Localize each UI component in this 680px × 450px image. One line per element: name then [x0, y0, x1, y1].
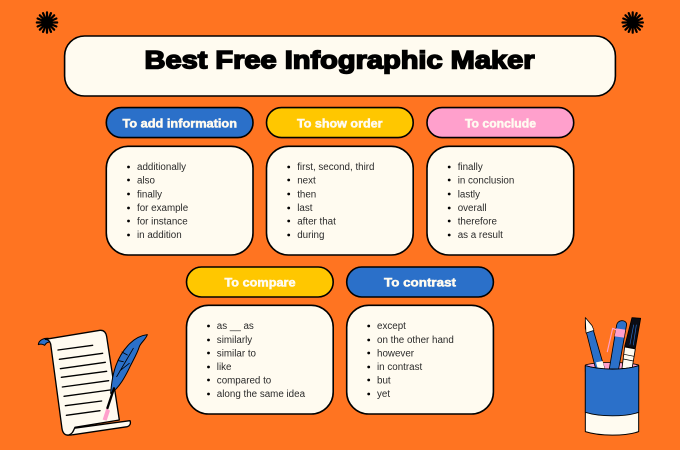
list: to contrast: but — [377, 375, 391, 386]
list: to compare: as __ as — [217, 321, 254, 332]
heading: to add information: To add information — [122, 118, 237, 130]
panel: to conclude — [427, 108, 574, 255]
list: to conclude — [427, 146, 574, 255]
list: to contrast — [347, 305, 493, 414]
heading: to conclude: To conclude — [465, 118, 536, 130]
heading: to add information — [106, 108, 253, 138]
list: to contrast: in contrast — [377, 362, 422, 373]
heading: to compare: To compare — [224, 278, 296, 290]
icon: pen cup — [585, 318, 641, 435]
list: to show order — [266, 146, 413, 255]
list: to conclude: as a result — [458, 230, 503, 241]
list: to add information: also — [137, 175, 156, 186]
list: to add information: additionally — [137, 162, 186, 173]
heading: to contrast — [347, 267, 493, 297]
icon: left star — [37, 12, 57, 33]
list: to conclude: overall — [458, 203, 487, 214]
list: to conclude: therefore — [458, 216, 497, 227]
list: to add information: finally — [137, 189, 162, 200]
list: to contrast: however — [377, 348, 415, 359]
list: to compare: like — [217, 362, 232, 373]
list: to conclude: lastly — [458, 189, 480, 200]
list: to compare: compared to — [217, 375, 272, 386]
title banner: Best Free Infographic Maker — [144, 46, 535, 74]
list: to conclude: finally — [458, 162, 483, 173]
panel: to add information — [106, 108, 253, 255]
heading: to contrast: To contrast — [384, 278, 456, 290]
heading: to conclude — [427, 108, 574, 138]
list: to add information: for example — [137, 203, 189, 214]
heading: to show order — [266, 108, 413, 138]
icon: paper scroll with quill — [38, 330, 147, 435]
list: to compare: similar to — [217, 348, 257, 359]
list: to show order: last — [297, 203, 313, 214]
list: to show order: next — [297, 175, 316, 186]
list: to contrast: on the other hand — [377, 335, 454, 346]
panel: to contrast — [347, 267, 493, 414]
list: to compare — [186, 305, 333, 414]
list: to show order: during — [297, 230, 324, 241]
icon: right star — [622, 12, 643, 33]
list: to compare: along the same idea — [217, 389, 306, 400]
title banner — [65, 36, 615, 96]
list: to show order: after that — [297, 216, 336, 227]
heading: to compare — [186, 267, 333, 297]
list: to conclude: in conclusion — [458, 175, 514, 186]
list: to compare: similarly — [217, 335, 252, 346]
panel: to show order — [266, 108, 413, 255]
list: to show order: then — [297, 189, 316, 200]
heading: to show order: To show order — [297, 118, 383, 130]
panel: to compare — [186, 267, 333, 414]
list: to add information: in addition — [137, 230, 182, 241]
list: to add information: for instance — [137, 216, 188, 227]
list: to show order: first, second, third — [297, 162, 375, 173]
list: to add information — [106, 146, 253, 255]
list: to contrast: yet — [377, 389, 390, 400]
list: to contrast: except — [377, 321, 406, 332]
